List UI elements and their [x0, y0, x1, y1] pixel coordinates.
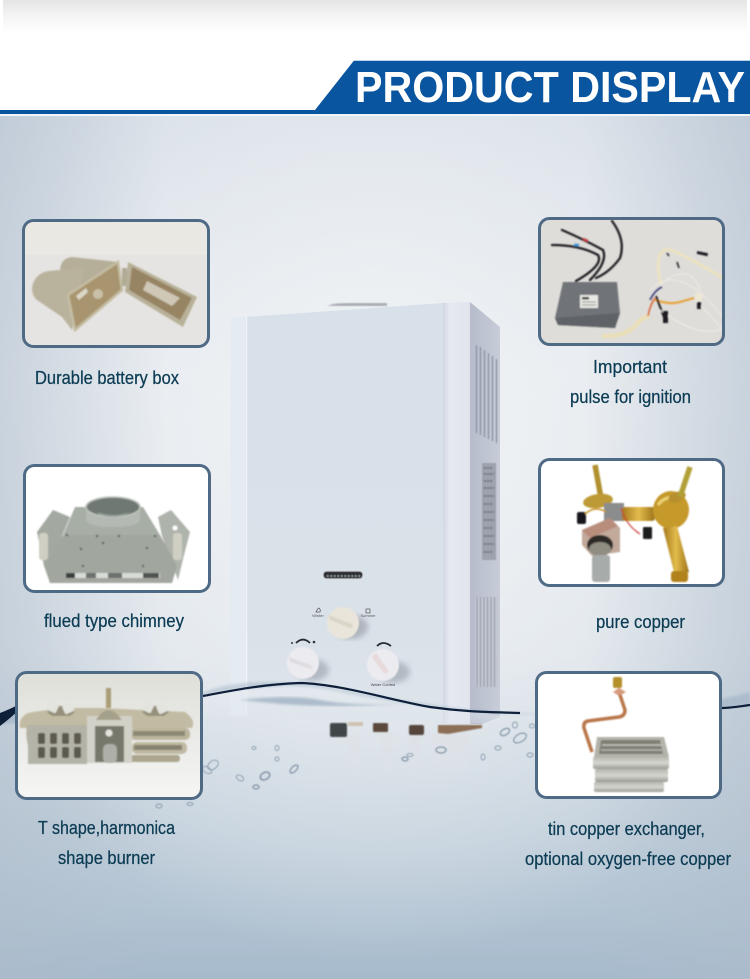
- small microswitch: [643, 527, 652, 539]
- caption: tin copper exchanger, optional oxygen-free copper: [525, 819, 731, 869]
- heater left edge strip: [230, 317, 247, 716]
- selector disc: [582, 492, 614, 510]
- connecting bracket: [604, 503, 624, 521]
- brass nut: [613, 677, 622, 688]
- exhaust slots: [66, 573, 160, 578]
- heater front face: [230, 303, 443, 723]
- caption: tin copper exchanger, optional oxygen-free copper: optional oxygen-free copper: [525, 849, 731, 869]
- caption: flued type chimney: flued type chimney: [44, 611, 184, 631]
- brass outlet tube: [663, 526, 689, 582]
- header banner: [0, 60, 750, 116]
- water surface: [0, 682, 750, 726]
- black cables: [552, 221, 622, 281]
- left flange: [37, 510, 70, 583]
- knob: water control: [367, 643, 410, 687]
- left slotted plate: [28, 725, 87, 764]
- right terminal pair: [142, 705, 169, 716]
- panel: battery box photo: [22, 219, 210, 348]
- left terminal pair: [47, 705, 75, 716]
- caption: T shape, harmonica shape burner: [38, 818, 176, 868]
- battery box lid: [125, 262, 197, 327]
- left bracket: [39, 533, 48, 560]
- copper pipe: [584, 695, 625, 752]
- rear battery cylinder: [60, 257, 118, 285]
- right bracket: [173, 533, 182, 560]
- panel: pure copper valve photo: [540, 460, 724, 586]
- panel: flued chimney photo: [24, 466, 210, 592]
- wiring harness: [648, 249, 725, 332]
- caption: T shape, harmonica shape burner: T shape,harmonica: [38, 818, 176, 838]
- central valve block: [87, 688, 132, 763]
- lower side vent: [475, 597, 498, 687]
- knob: season selector: Summer: [360, 613, 376, 618]
- pipe reflections: [347, 733, 469, 781]
- display window: [323, 571, 363, 579]
- front plate: [46, 535, 177, 583]
- caption: tin copper exchanger, optional oxygen-free copper: tin copper exchanger,: [548, 819, 705, 839]
- panel: copper heat exchanger photo: [536, 672, 720, 798]
- caption: T shape, harmonica shape burner: shape burner: [58, 848, 155, 868]
- left brass rod: [595, 465, 601, 498]
- flue collar: [86, 497, 140, 527]
- knob: season selector: Winter: [312, 613, 324, 618]
- brass horizontal pipe: [622, 507, 655, 521]
- brass valve body: [653, 489, 689, 529]
- bottom fittings: [330, 722, 482, 737]
- submerged veil over heater base: [200, 684, 500, 725]
- burner back plate: [20, 708, 193, 728]
- product: water heater: [200, 302, 500, 781]
- knob: gas control: [287, 640, 329, 681]
- flue collar on top: [328, 303, 387, 306]
- right flange: [158, 510, 190, 580]
- heater corner strip: [443, 302, 470, 724]
- right brass rod: [680, 467, 690, 497]
- heater side face: [470, 302, 500, 724]
- caption: pure copper: pure copper: [596, 612, 685, 632]
- side rating label: [482, 463, 496, 560]
- caption: durable battery box: Durable battery box: [35, 368, 179, 388]
- water bubbles: [156, 722, 534, 808]
- silver gas fitting: [592, 555, 610, 582]
- front battery cylinder: [32, 268, 84, 330]
- exchanger top tray: [594, 737, 669, 757]
- solenoid coil: [582, 518, 620, 556]
- burner stacked fins: [130, 728, 190, 762]
- pipe flange: [613, 688, 626, 696]
- black connector: [577, 512, 586, 524]
- exchanger layered body: [593, 757, 669, 792]
- knob: water control: Water Control: [371, 682, 395, 687]
- knob: season selector: [312, 607, 376, 639]
- panel: ignition pulse photo: [538, 217, 725, 346]
- upper side vent: [476, 345, 496, 443]
- caption: important pulse for ignition: Important: [593, 357, 667, 377]
- battery box opening: [68, 262, 122, 330]
- ignition control box: [555, 282, 620, 328]
- top plate: [63, 507, 160, 535]
- cream wire sleeve: [602, 316, 650, 336]
- caption: important pulse for ignition: [570, 357, 691, 407]
- left stacked edge: [26, 727, 29, 744]
- caption: important pulse for ignition: pulse for ignition: [570, 387, 691, 407]
- panel: burner photo: [15, 671, 203, 800]
